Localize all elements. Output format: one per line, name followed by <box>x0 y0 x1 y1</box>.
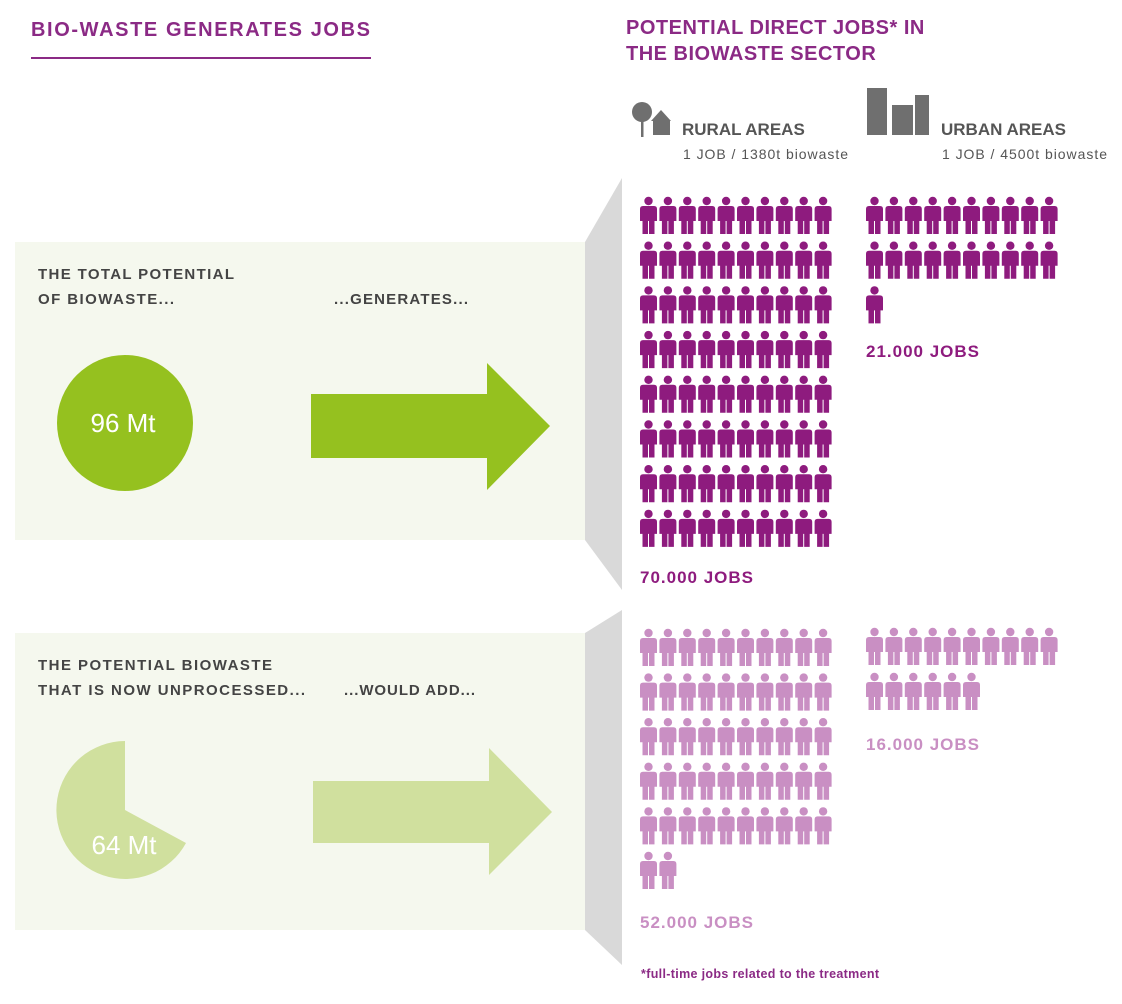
urban jobs total <box>866 197 1058 361</box>
icon: rural <box>632 102 671 137</box>
urban header: URBAN AREAS <box>941 120 1066 139</box>
panel: total potential: 96 Mt <box>90 408 156 438</box>
urban header <box>941 120 1107 162</box>
urban jobs added <box>866 628 1058 754</box>
panel: unprocessed: THAT IS NOW UNPROCESSED... <box>38 682 305 699</box>
rural header: RURAL AREAS <box>682 120 805 139</box>
rural header <box>682 120 848 162</box>
icon: urban <box>867 88 929 135</box>
panel: unprocessed: 64 Mt <box>91 830 157 860</box>
panel: unprocessed <box>15 610 622 965</box>
panel: unprocessed: ...WOULD ADD... <box>344 682 475 699</box>
rural jobs added: 52.000 JOBS <box>640 913 753 932</box>
panel: total potential: ...GENERATES... <box>334 291 468 308</box>
right title: THE BIOWASTE SECTOR <box>626 43 876 65</box>
panel: unprocessed: THE POTENTIAL BIOWASTE <box>38 657 272 674</box>
footnote: *full-time jobs related to the treatment <box>641 967 880 981</box>
panel: total potential: OF BIOWASTE... <box>38 291 174 308</box>
rural jobs total <box>640 197 832 587</box>
urban jobs total: 21.000 JOBS <box>866 342 979 361</box>
panel: total potential <box>15 178 622 590</box>
panel: total potential: THE TOTAL POTENTIAL <box>38 266 234 283</box>
rural jobs total: 70.000 JOBS <box>640 568 753 587</box>
rural header: 1 JOB / 1380t biowaste <box>683 146 848 162</box>
title: BIO-WASTE GENERATES JOBS <box>31 19 370 41</box>
rural jobs added <box>640 629 832 932</box>
urban header: 1 JOB / 4500t biowaste <box>942 146 1107 162</box>
right title: POTENTIAL DIRECT JOBS* IN <box>626 17 925 39</box>
urban jobs added: 16.000 JOBS <box>866 735 979 754</box>
